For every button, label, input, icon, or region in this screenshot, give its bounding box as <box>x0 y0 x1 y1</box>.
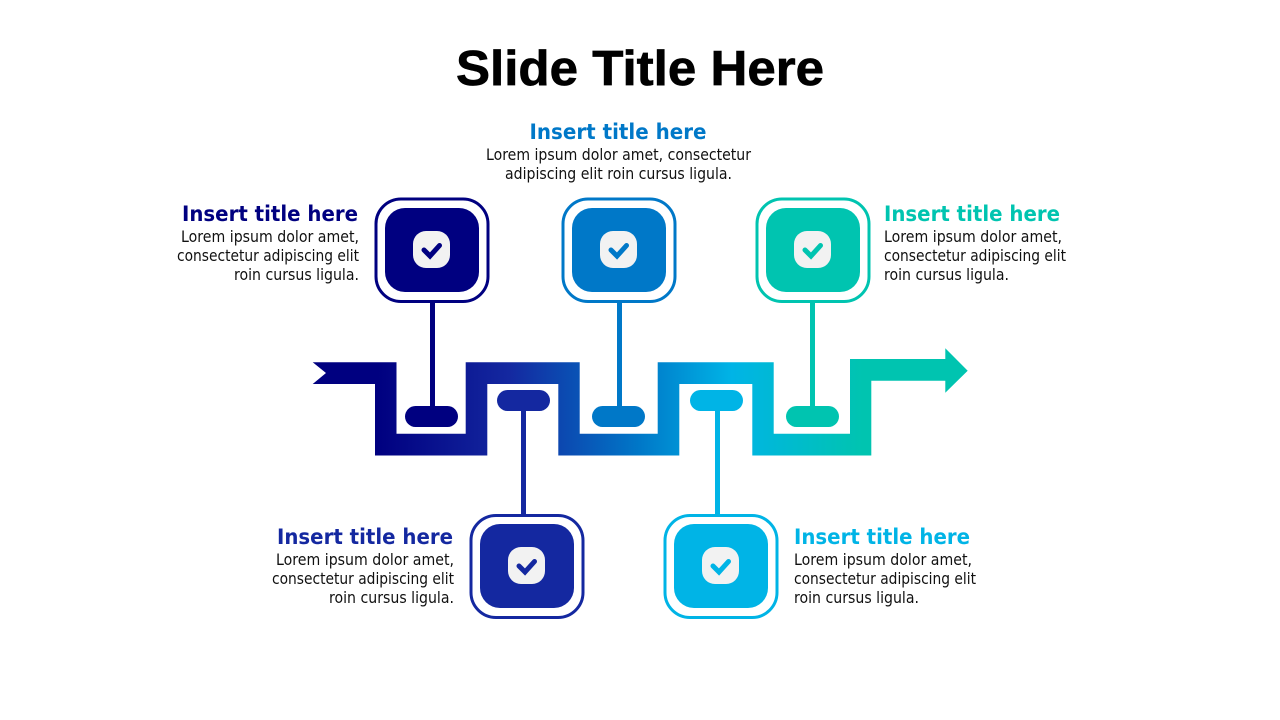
text block 5: Insert title here <box>884 202 1060 226</box>
title: Slide Title Here <box>456 42 824 96</box>
connector 4 <box>690 390 743 516</box>
connector 1 <box>405 302 458 427</box>
icon: check 1 <box>413 231 450 268</box>
step 4: sky <box>665 390 976 618</box>
card 4 <box>665 516 777 618</box>
text block 2: Lorem ipsum dolor amet, <box>276 550 454 569</box>
icon: check 4 <box>702 547 739 584</box>
step 2: indigo <box>272 390 583 618</box>
text block 3: Insert title here <box>530 120 706 144</box>
text block 4 <box>794 525 976 607</box>
text block 4: consectetur adipiscing elit <box>794 569 976 588</box>
text block 3: adipiscing elit roin cursus ligula. <box>505 164 732 183</box>
text block 5 <box>884 202 1066 284</box>
card 2 <box>471 516 583 618</box>
text block 5: roin cursus ligula. <box>884 265 1009 284</box>
step 1: navy <box>177 199 488 427</box>
connector 5 <box>786 302 839 427</box>
connector 2 <box>497 390 550 516</box>
card 1 <box>376 199 488 302</box>
text block 2: roin cursus ligula. <box>329 588 454 607</box>
text block 5: consectetur adipiscing elit <box>884 246 1066 265</box>
step 5: teal <box>757 199 1066 427</box>
text block 2: consectetur adipiscing elit <box>272 569 454 588</box>
text block 2 <box>272 525 454 607</box>
text block 1 <box>177 202 359 284</box>
text block 2: Insert title here <box>277 525 453 549</box>
text block 1: Insert title here <box>182 202 358 226</box>
ribbon arrow <box>313 348 968 456</box>
text block 4: roin cursus ligula. <box>794 588 919 607</box>
text block 4: Lorem ipsum dolor amet, <box>794 550 972 569</box>
text block 4: Insert title here <box>794 525 970 549</box>
icon: check 5 <box>794 231 831 268</box>
text block 5: Lorem ipsum dolor amet, <box>884 227 1062 246</box>
step 3: blue <box>486 120 751 427</box>
text block 3: Lorem ipsum dolor amet, consectetur <box>486 145 751 164</box>
icon: check 2 <box>508 547 545 584</box>
icon: check 3 <box>600 231 637 268</box>
text block 1: Lorem ipsum dolor amet, <box>181 227 359 246</box>
connector 3 <box>592 302 645 427</box>
text block 1: roin cursus ligula. <box>234 265 359 284</box>
card 3 <box>563 199 675 302</box>
text block 1: consectetur adipiscing elit <box>177 246 359 265</box>
card 5 <box>757 199 869 302</box>
text block 3 <box>486 120 751 183</box>
